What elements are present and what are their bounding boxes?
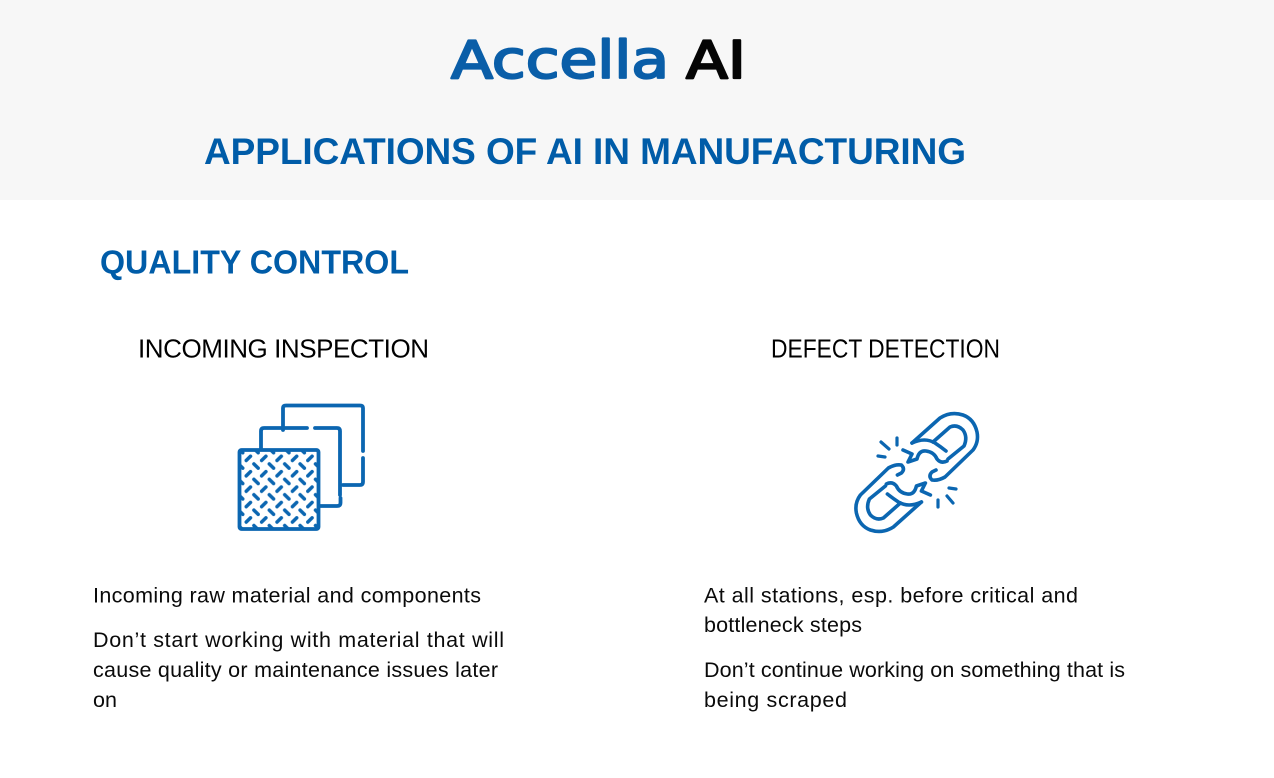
text: defect detection description — [704, 584, 1125, 712]
icon: stacked material sheets — [240, 406, 363, 529]
heading: incoming inspection: INCOMING INSPECTION — [138, 334, 429, 364]
text: incoming inspection description: Incoming raw material and components — [93, 584, 481, 608]
logo: Accella AI: Accella — [451, 31, 669, 91]
text: defect detection description: Don’t continue working on something that is — [704, 658, 1125, 682]
panel: defect detection — [704, 334, 1125, 712]
text: incoming inspection description: cause quality or maintenance issues later — [93, 658, 498, 682]
title: APPLICATIONS OF AI IN MANUFACTURING — [204, 131, 966, 172]
icon: broken chain link — [856, 414, 978, 531]
panel: incoming inspection — [93, 334, 504, 712]
header band — [0, 0, 1274, 200]
logo: Accella AI — [451, 31, 746, 91]
section heading: quality control: QUALITY CONTROL — [100, 244, 409, 282]
text: defect detection description: At all stations, esp. before critical and — [704, 584, 1078, 608]
text: incoming inspection description: Don’t start working with material that will — [93, 628, 504, 652]
text: incoming inspection description: on — [93, 688, 117, 712]
heading: defect detection: DEFECT DETECTION — [771, 334, 1000, 364]
text: defect detection description: bottleneck steps — [704, 613, 862, 637]
text: incoming inspection description — [93, 584, 504, 712]
text: defect detection description: being scraped — [704, 688, 847, 712]
logo: Accella AI: AI — [686, 31, 746, 91]
